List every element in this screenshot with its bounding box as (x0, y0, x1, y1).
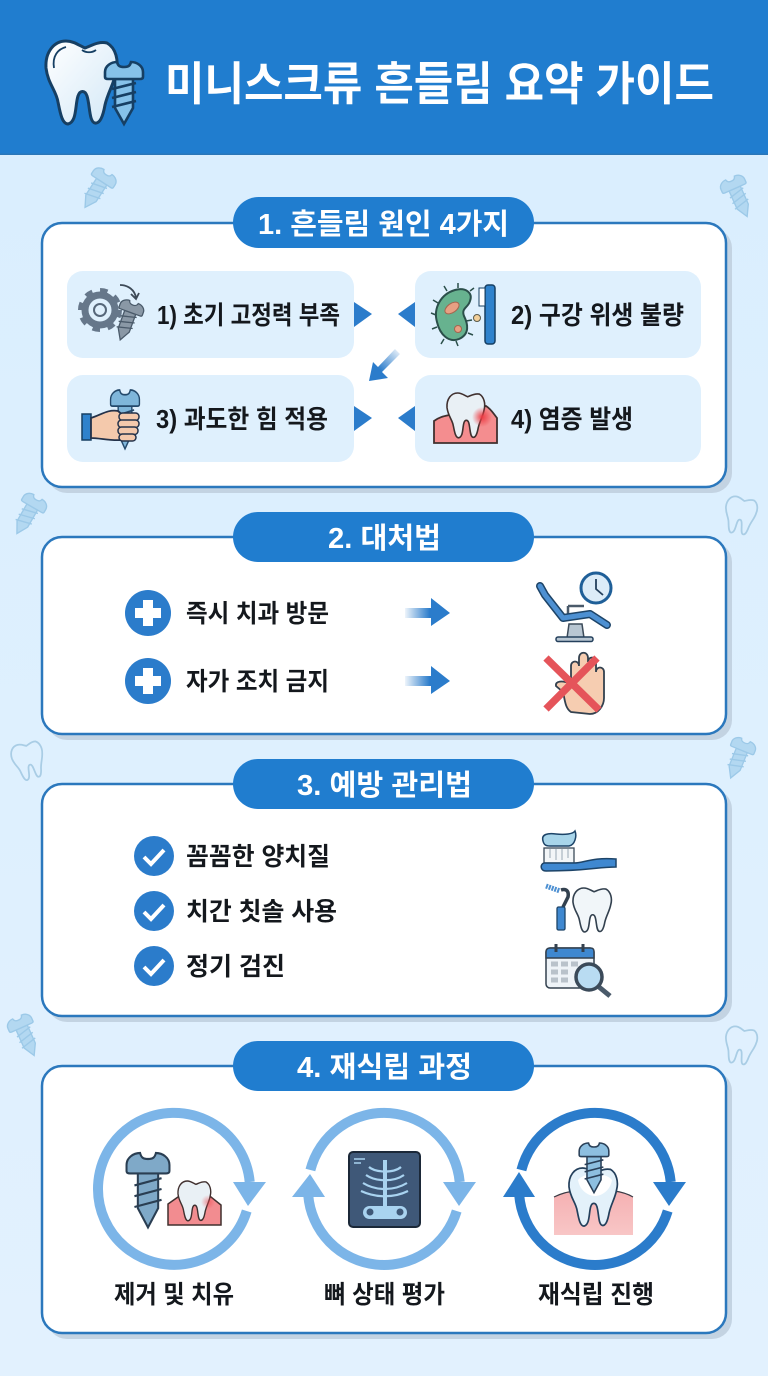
item: visit clinic: 즉시 치과 방문 (186, 600, 329, 628)
cycle ring 1 (98, 1113, 266, 1265)
card: cause 4 (415, 375, 701, 462)
decorative tooth left middle (9, 739, 48, 782)
item: visit clinic (125, 590, 329, 636)
card: cause 3 (67, 375, 354, 462)
icon: hand with red cross (546, 653, 604, 714)
label: 3) 과도한 힘 적용 (156, 406, 328, 434)
heading pill 4 (233, 1041, 534, 1091)
label: 4) 염증 발생 (511, 406, 633, 434)
cycle ring 3 (503, 1113, 686, 1265)
icon: bacteria and toothbrush (431, 283, 495, 346)
decorative screw top right (718, 173, 759, 222)
card: cause 2 (415, 271, 701, 358)
step 3: re-implant (503, 1113, 686, 1309)
icon: interdental brush and tooth (546, 886, 611, 932)
icon: x-ray (349, 1152, 420, 1227)
header band (0, 0, 768, 155)
title: 미니스크류 흔들림 요약 가이드 (165, 58, 714, 110)
panel: section 4 re-implantation (42, 1041, 732, 1339)
label: 1) 초기 고정력 부족 (157, 302, 340, 330)
item: no self treatment: 자가 조치 금지 (186, 668, 329, 696)
icon: implant in tooth (554, 1143, 633, 1235)
item: interdental brush (134, 891, 337, 931)
icon: screw and gum (127, 1153, 221, 1227)
item: brushing: 꼼꼼한 양치질 (186, 843, 330, 871)
item: checkup: 정기 검진 (186, 953, 285, 981)
heading pill 4: 4. 재식립 과정 (297, 1051, 472, 1084)
arrow: cause 2 left (398, 302, 415, 327)
item: brushing (134, 836, 330, 876)
icon: dental chair and clock (540, 573, 611, 642)
decorative screw right middle (719, 735, 758, 783)
step 1: removal and healing (98, 1113, 266, 1309)
heading pill 3 (233, 759, 534, 809)
decorative tooth right lower (722, 1025, 759, 1066)
cycle ring 2 (292, 1113, 476, 1265)
decorative screw left lower (5, 1012, 46, 1061)
icon: toothbrush with paste (541, 831, 616, 871)
panel: section 2 response (42, 512, 732, 740)
arrow: diagonal (369, 349, 400, 381)
step 2: bone assessment (292, 1113, 476, 1309)
step 2: bone assessment: 뼈 상태 평가 (324, 1281, 445, 1309)
icon: gear and screw (80, 285, 146, 344)
icon: tooth with screw (46, 41, 143, 124)
item: no self treatment (125, 658, 329, 704)
arrow: cause 3 right (354, 406, 372, 431)
arrow: to prohibition (405, 666, 450, 694)
heading pill 2: 2. 대처법 (328, 522, 441, 555)
label: 2) 구강 위생 불량 (511, 302, 684, 330)
icon: calendar with magnifier (546, 944, 610, 996)
decorative screw left middle (6, 491, 49, 540)
item: checkup (134, 946, 285, 986)
card: cause 1 (67, 271, 354, 358)
arrow: cause 1 right (354, 302, 372, 327)
step 1: removal and healing: 제거 및 치유 (114, 1281, 234, 1309)
decorative screw top left (74, 165, 119, 214)
panel: section 3 prevention (42, 759, 732, 1022)
arrow: cause 4 left (398, 406, 415, 431)
item: interdental brush: 치간 칫솔 사용 (186, 898, 337, 926)
heading pill 1 (233, 197, 534, 248)
icon: inflamed tooth (434, 393, 497, 443)
heading pill 3: 3. 예방 관리법 (297, 769, 472, 802)
icon: hand gripping screw (82, 390, 139, 449)
panel: section 1 causes (42, 197, 732, 493)
arrow: to clinic (405, 598, 450, 626)
heading pill 1: 1. 흔들림 원인 4가지 (258, 208, 509, 241)
decorative tooth right upper (722, 495, 759, 536)
heading pill 2 (233, 512, 534, 562)
step 3: re-implant: 재식립 진행 (538, 1281, 654, 1309)
